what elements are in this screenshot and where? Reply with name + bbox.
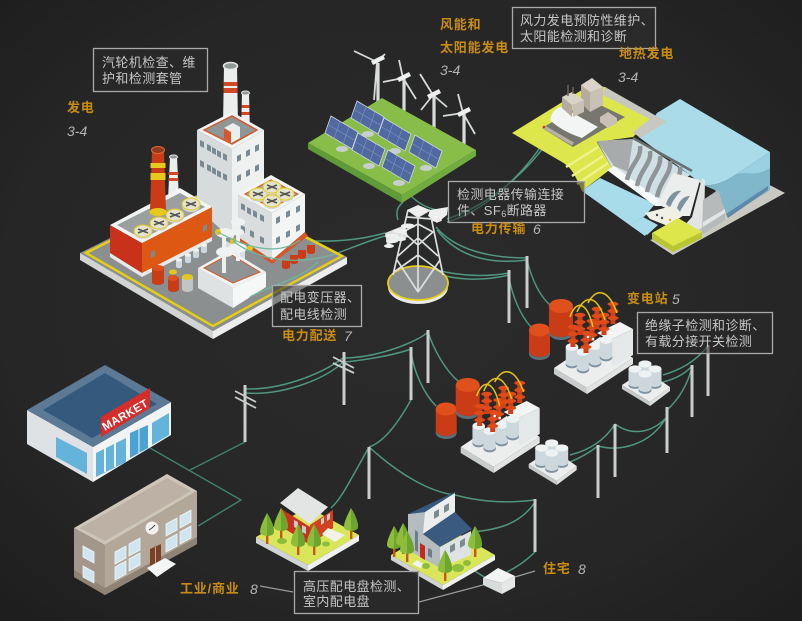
heading: transmission: 6 [533, 221, 541, 237]
small transformer one [622, 360, 670, 406]
white annex with cooling fans [238, 175, 308, 264]
heading: residential: 住宅 [543, 561, 571, 576]
callout: transmission inspection: 断路器 [507, 203, 547, 218]
green field [308, 98, 476, 203]
callout: switchboard inspection: 室内配电盘 [303, 594, 370, 609]
callout: turbine inspection [94, 48, 208, 92]
heading: wind and solar: 太阳能发电 [440, 40, 509, 55]
heading: wind and solar: 3-4 [440, 62, 460, 78]
transmission tower [384, 205, 448, 304]
callout: switchboard inspection: 高压配电盘检测、 [303, 579, 410, 594]
power poles [235, 256, 708, 552]
lower river water [582, 178, 655, 236]
plant ground platform [80, 187, 347, 339]
heading: industry and commerce: 8 [250, 581, 258, 597]
yellow hillside [512, 85, 667, 191]
callout: wind and solar inspection [512, 8, 656, 48]
connector lines [260, 571, 535, 602]
reservoir water [640, 99, 770, 218]
red turbine hall [110, 146, 212, 277]
heading: transmission: 电力传输 [471, 221, 526, 236]
lower yellow bank [652, 218, 702, 252]
heading: geothermal: 地热发电 [619, 46, 674, 61]
callout: wind and solar inspection: 太阳能检测和诊断 [520, 29, 627, 44]
callout: distribution inspection [272, 286, 362, 326]
generation plant illustration [80, 62, 347, 339]
white chimney pair on tower [223, 62, 250, 134]
grey base slab [650, 180, 785, 255]
clock [146, 522, 158, 534]
callout: wind and solar inspection: 风力发电预防性维护、 [520, 13, 654, 28]
wind and solar farm [308, 51, 476, 203]
substation one [529, 293, 633, 394]
tower base disc [388, 266, 448, 304]
heading: generation [67, 100, 95, 139]
heading: residential [543, 561, 586, 577]
heading: substation: 变电站 [627, 291, 668, 306]
heading: generation: 发电 [67, 100, 95, 115]
heading: substation: 5 [672, 291, 680, 307]
heading: distribution: 电力配送 [282, 328, 337, 343]
heading: wind and solar: 风能和 [440, 17, 481, 32]
heading: residential: 8 [578, 561, 586, 577]
tall white building [197, 112, 264, 240]
callout: switchboard inspection [294, 572, 418, 614]
callout: substation inspection: 绝缘子检测和诊断、 [645, 318, 766, 333]
storage tanks [152, 243, 315, 292]
callout: transmission inspection: 检测电器传输连接 [457, 187, 564, 202]
callout: transmission inspection [448, 182, 584, 222]
heading: generation: 3-4 [67, 123, 87, 139]
house two [387, 492, 495, 590]
school building [74, 474, 197, 595]
heading: geothermal [618, 46, 674, 85]
callout: turbine inspection: 汽轮机检查、维 [102, 55, 196, 70]
hydro and geothermal station [512, 78, 785, 255]
callout: transmission inspection: 件、SF [457, 203, 501, 218]
callout: transmission inspection: 6 [501, 209, 507, 219]
market building [27, 365, 171, 482]
small transformer two [529, 439, 577, 485]
wind turbines behind field [354, 51, 475, 156]
market sign: MARKET [100, 398, 151, 434]
callout: turbine inspection: 护和检测套管 [102, 71, 182, 86]
solar panels [325, 101, 442, 186]
geothermal plant [542, 78, 625, 147]
callout: substation inspection [638, 312, 772, 354]
small red and white chimneys [168, 155, 179, 200]
heading: industry and commerce: 工业/商业 [180, 581, 240, 596]
lattice [393, 210, 443, 292]
insulator arms [384, 205, 448, 248]
callout: substation inspection: 有载分接开关检测 [645, 334, 752, 349]
substation two [436, 372, 540, 473]
heading: wind and solar [440, 17, 509, 78]
callout: distribution inspection: 配电变压器、 [280, 290, 360, 305]
heading: distribution: 7 [344, 328, 353, 344]
power lines network [150, 135, 708, 578]
callout: distribution inspection: 配电线检测 [280, 307, 347, 322]
house one [256, 488, 359, 571]
junction box [483, 568, 515, 594]
plant internal wires [218, 232, 335, 297]
dam with spillways [597, 138, 725, 235]
heading: geothermal: 3-4 [618, 69, 638, 85]
front white transformer box with insulators [198, 218, 266, 308]
